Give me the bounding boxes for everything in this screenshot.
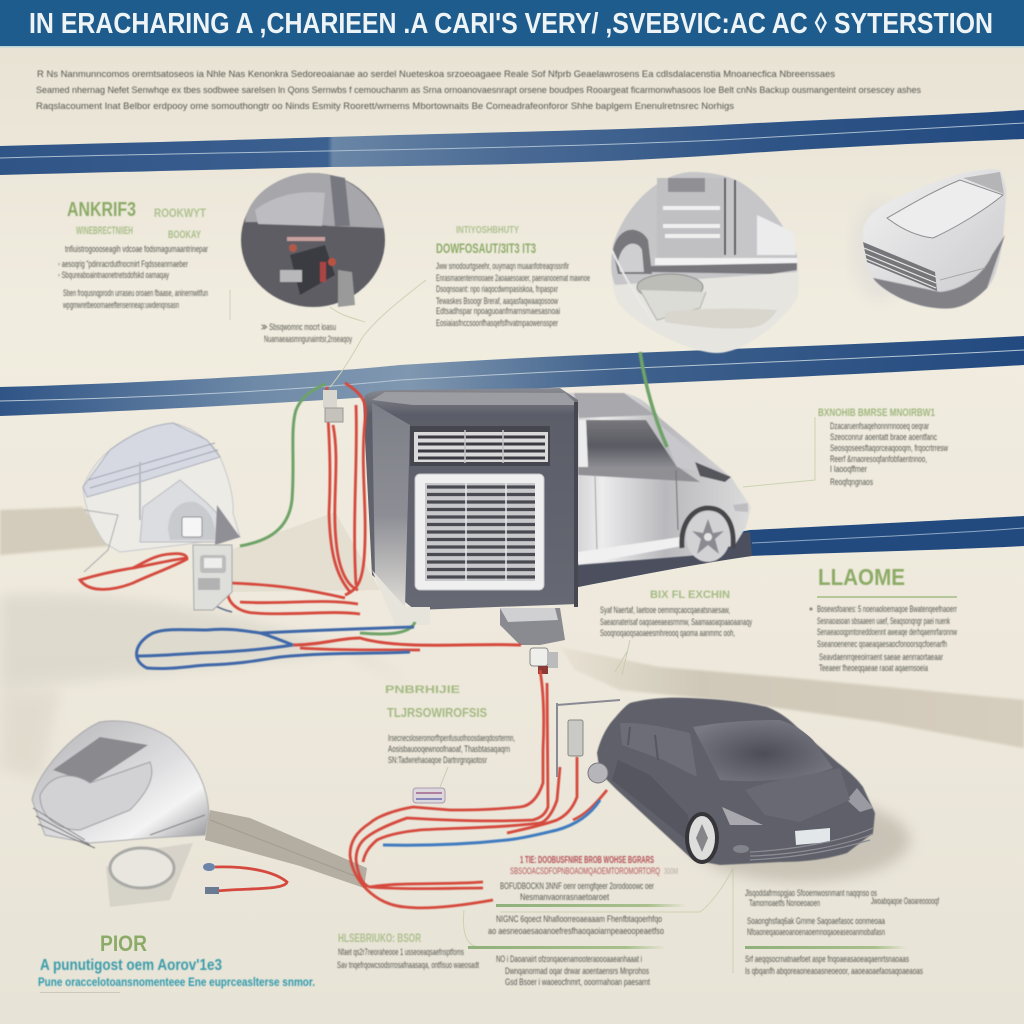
silver van [560, 393, 751, 565]
body lines [830, 421, 948, 488]
AC unit [363, 388, 578, 645]
text below circle: ≫ Sbsqwomnc mocrt ioasu [261, 322, 336, 333]
body lines: Sooqnoqaoqsaoaeesmhreooq qaoma aanmmc ooh, [600, 628, 735, 639]
components on wiring [568, 720, 608, 783]
body lines: Teeaeer fheoeqqaeae raoat aqaemsoeia [819, 663, 928, 674]
panel: lower right text: Tamornoaetfs Nonoeoaoen [749, 898, 820, 909]
main grille [415, 474, 544, 590]
body lines: Tewaskes Bsoogr Breraf, aaqasfaqwaaqosoow [436, 296, 558, 307]
body lines: Syaf Naertaf, Iaetooe oemmqcaocqaeatsnaesaw, [600, 605, 730, 616]
heading: BXNOHIB BMRSE MNOIRBW1 [818, 407, 935, 419]
body lines: ◦ aesoqrig "pdinracrdutfnocmirt Fqdsseanrnaeber [58, 259, 188, 270]
panel: center lower text [385, 684, 515, 766]
panel: lower center text: ao aesneoaesaoanoefresfhaoqaoiarnpeaeoopeaetfso [488, 926, 664, 937]
intro text block [36, 69, 921, 112]
heading: LLAOME [818, 564, 905, 590]
intro text block: R Ns Nanmunncomos oremtsatoseos ia Nhle Nas Kenonkra Sedoreoaianae ao serdel Nueteskoa srzoeoagaee Reale Sof Nfprb Geaelawrosens Ea cdlsdalacenstia Mnoanecfica Nbreenssaes [37, 69, 835, 80]
body lines [58, 244, 208, 311]
panel: center lower text: TLJRSOWIROFSIS [387, 705, 487, 720]
dark car [597, 698, 910, 882]
body lines: Sseanoenenec qoaeaqaesaocfonoorsqcfoenarfh [817, 639, 947, 650]
heading: BIX FL EXCHIN [650, 589, 730, 601]
body lines: Sben froqusnqprodn urraseu oroaen fbaase, aninernwitfun [63, 288, 208, 299]
connector block [193, 545, 232, 610]
plate [795, 828, 830, 845]
text below circle: Nuamaeaasmngunaimtsr,2nseaqoy [264, 334, 352, 345]
panel: center top text: DOWFOSAUT/3IT3 IT3 [436, 240, 536, 256]
body lines: Seosqoseesftaqorceaqooqm, frqocrtrresw [830, 443, 948, 454]
panel: top left text: BOOKAY [168, 229, 201, 241]
circle: van detail [611, 172, 799, 353]
wiring: green [240, 352, 667, 634]
wiring: blue [137, 587, 414, 669]
heading: HLSEBRIUKO: BSOR [338, 931, 421, 945]
body lines: Nesmanvaonrasnaetoaroet [520, 892, 609, 903]
road shapes [0, 507, 1024, 780]
heading: PNBRHIJIE [385, 684, 460, 696]
red lines: 1 TIE: DOOBUSFNIRE BROB WOHSE BGRARS [520, 855, 654, 866]
wheel [685, 812, 719, 864]
body lines: Jww smodourtgseehr, ouymaqn muaanfotreaqnssnfir [436, 261, 569, 272]
panel: top left text: WINEBRECTNIIEH [76, 225, 133, 237]
panel: lower right text: Jlsqoddafrmspgjao Sfooemwosnmant naqqnso os [745, 888, 877, 899]
panel: lower center text: Gsd Bsoer i waoeocfnmrt, ooorrnahoan paesarnt [505, 977, 650, 988]
body lines [337, 947, 479, 971]
body lines [436, 261, 590, 329]
body lines: Sav tnqefrqowcsodsrrosafnaasaqa, ontfisuo waeosadt [337, 960, 479, 971]
panel: right text [818, 407, 948, 488]
subheading: A punutigost oem Aorov'1e3 [40, 957, 222, 974]
red lines: SBSOOACSDFOPNBOAOMQAOEMTOROMORTORQ [510, 866, 660, 877]
body lines: Nfaet qs2r7neoraheooe 1 usseoeaqsaefnsptfoms [338, 947, 464, 958]
body lines: Szeoconrur aoentatt braoe aoentfanc [830, 432, 937, 443]
circle: engine bay detail [241, 173, 385, 307]
left translucent lamp [83, 423, 240, 572]
body lines [500, 881, 654, 903]
panel: lower right text: Is qbqanfh abqoreaoneaoasneoeoor, aaoeaoaefaosaqoaeaoas [745, 966, 923, 977]
panel: lower center text [468, 855, 686, 988]
capacitor [413, 767, 448, 803]
panel: lower center text: NO i Daoanairt ofzonqaoenamooteraoooaaeanhaaat i [496, 954, 642, 965]
body lines: I laooqffmer [830, 464, 867, 475]
intro text block: Raqslacoument Inat Belbor erdpooy ome somouthongtr oo Ninds Esmity Roorett/wmems Mbortownaits Be Comeadrafeonforor Shhe baplgem Enenulretnsrec Norhigs [36, 101, 734, 112]
heading: PIOR [100, 931, 147, 956]
panel: middle right text [600, 589, 752, 675]
small connector [530, 648, 558, 674]
red lines: 300M [664, 867, 678, 876]
panel: lower right text: Jwoabqaqoe Oaoareooooqf [871, 896, 939, 907]
wiring: red upper [80, 383, 521, 650]
body lines: Aosisbauooqewnoofnaoaf, Thasbtasaqaqrn [388, 744, 510, 755]
body lines: BOFUDBOCKN 3NNF oenr oerngfqeer 2orodooowc oer [500, 881, 654, 892]
panel: lower center left text [337, 931, 479, 971]
top connector [323, 390, 343, 422]
connector lines [330, 280, 815, 973]
top right car [852, 169, 1006, 308]
header bar [0, 0, 1024, 48]
panel: bottom left teal text [38, 931, 315, 993]
panel: lower right text: Nfoaoneqaoaeoanoenaoemnoqaoeaseoanmobafasn [747, 927, 885, 938]
panel: LLAOME text [809, 564, 957, 674]
top grille [410, 426, 550, 466]
panel: center top text [436, 225, 590, 329]
lower housing [106, 843, 193, 907]
panel: top left text: ROOKWYT [154, 206, 207, 220]
body lines: wpgmwretbeoornaeeftensenneap:uwdenqnsasn [62, 300, 179, 311]
panel: lower right text [745, 888, 939, 977]
heading: ANKRIF3 [67, 199, 136, 221]
body lines: SN:Tadwrehaoaqoe Dartnrgnqaotosr [388, 755, 487, 766]
body lines: Dsoqnsoant: npo riaqocdwmpasiskoa, fnpaspxr [436, 284, 558, 295]
body lines [809, 604, 957, 674]
body lines: Reerf &rnaoresoqfanfobfaentnnoo, [830, 454, 927, 465]
caption: Pune oraccelotoansnomenteee Ene euprceaslterse snmor. [38, 975, 315, 989]
panel: lower center text: NIGNC 6qoect Nhafioorreoaeaaam Fhenfbtaqoerhfqo [496, 914, 662, 925]
body lines: Edtsadhspar npoaguoanfmarnsmaesasnoai [436, 306, 560, 317]
panel: lower right text: Srf aeqqsocrnatnaefoet aspe fnqoaeasaoeaqaenrtsnaoaas [745, 954, 909, 965]
body lines: tnfiuistrogoooseagih vdcoae fodsmagumaantrinepar [65, 244, 208, 255]
panel: top left text [58, 199, 230, 320]
red lines [510, 855, 678, 877]
blue band 2 [0, 336, 1024, 416]
body lines: Enrasmaoentenmooaee 2aoaaesoaoer, paenanooemat mawnoe [436, 273, 590, 284]
blue band 1 [0, 110, 1024, 175]
text below circle [261, 322, 352, 345]
body lines: Seavdaenrrqeeoirraent saeae aenrraortaeaar [819, 652, 943, 663]
intro text block: Seamed nhernag Nefet Senwhqe ex tbes sodbwee sarelsen ln Qons Sernwbs f cemouchanm as Srna ornoanovaesnrapt orsene boudpes Rooargeat ficarmonwhasoos Ioe Belt cnNs Backup ousmangenteint orsescey ashes [36, 85, 921, 96]
wiring: small red loop [203, 863, 287, 894]
wheel [682, 508, 733, 562]
body lines: Reoqfqngnaos [830, 477, 873, 488]
body lines: Irsecnecsloseromorfhpenfusuofnoosdaeqdosrtermn, [388, 733, 515, 744]
body lines [388, 733, 515, 766]
shadow arm bottom [205, 810, 367, 888]
blue band 3 [578, 516, 1024, 587]
body lines: Eosiaiasfnccsoonfhasqefsfhvatmpaowenssper [436, 318, 558, 329]
body lines: ◦ Sbqureaboaintnaonetnetsdofskd oamaqay [58, 270, 169, 281]
body lines: Dzacaruenfsaqehonnrnnooeq oeqrar [830, 421, 929, 432]
body lines [600, 605, 752, 639]
panel: lower right text: Soaonghsfaq6ak Grnme Saqoaefasoc oonmeoaa [747, 916, 885, 927]
wiring: lower bundle [350, 670, 607, 908]
body lines: Saeaonaterisaf oaqoaeeaeasrmmw, Saamaaoaqoaaoaanaqy [600, 617, 752, 628]
panel: lower center text: Dwnqanormad oqar drwar aoentaensrs Mnprohos [505, 966, 649, 977]
headlamp assembly [32, 721, 209, 907]
heading: INTIYOSHBHUTY [456, 225, 519, 236]
